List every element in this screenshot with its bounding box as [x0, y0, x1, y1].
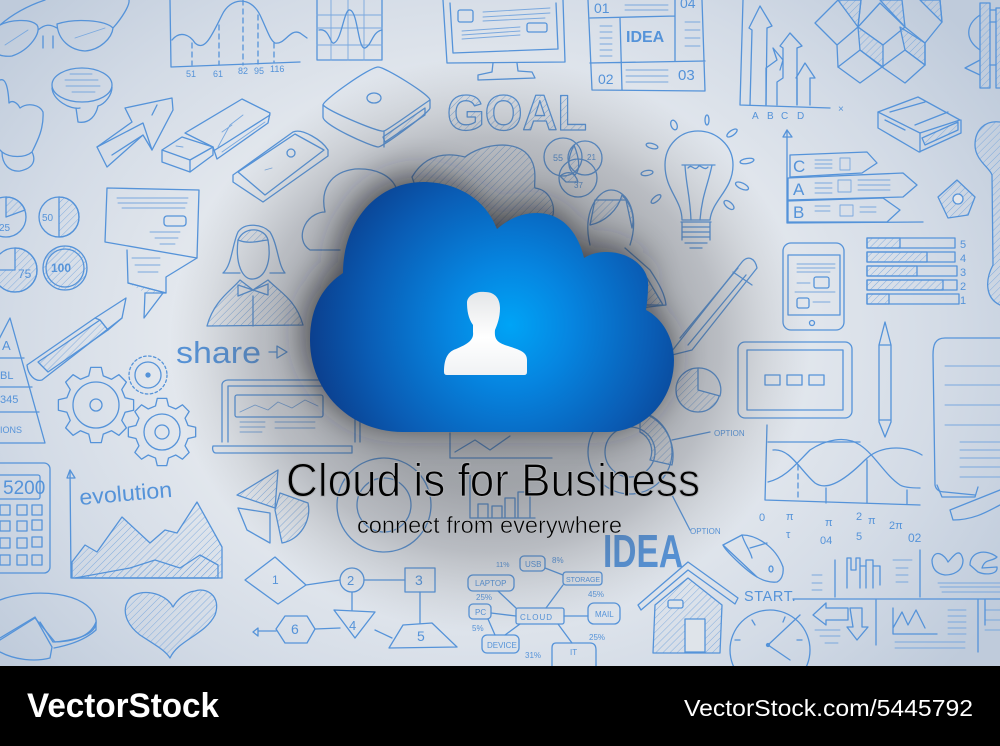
- target chart: [337, 458, 431, 552]
- blue cloud: [310, 182, 674, 432]
- panel: idea notes: IDEA: [626, 29, 665, 46]
- flowchart: 1: [272, 573, 279, 587]
- icon: laptop: [213, 380, 360, 453]
- wave chart: [765, 425, 922, 505]
- icon: calculator: [0, 463, 50, 573]
- ABC arrow labels: C: [793, 157, 805, 176]
- triangle chart: A: [2, 338, 11, 353]
- icon: hexagon nut: [938, 180, 975, 218]
- icon: speech bubble: [52, 68, 112, 122]
- document sketch: [933, 338, 1000, 520]
- cloud mind map: [468, 556, 620, 668]
- icon: tablet: [738, 342, 852, 418]
- ABC arrow labels: A: [793, 180, 805, 199]
- fractions axis text: [759, 511, 922, 547]
- panel: idea notes: 02: [598, 71, 614, 87]
- arrow growth chart: A: [752, 111, 759, 122]
- panel: idea notes: 03: [678, 67, 695, 84]
- cloud mind map: DEVICE: [487, 641, 517, 650]
- icon: mini server: [323, 67, 430, 147]
- fractions axis text: 04: [820, 535, 832, 547]
- icon: pen: [879, 322, 891, 437]
- icon: gears: [58, 356, 196, 466]
- fractions axis text: 2π: [889, 520, 903, 532]
- icon: pencil left: [27, 298, 126, 380]
- pie exploded: [237, 470, 309, 543]
- text: goal: GOAL: [447, 85, 587, 141]
- arrow growth chart: [740, 0, 844, 122]
- icon: monitor: [443, 0, 565, 80]
- text: idea: IDEA: [603, 525, 683, 577]
- user sketch right: [588, 190, 666, 308]
- panel: idea notes: 01: [594, 0, 610, 16]
- small grid chart: [317, 0, 382, 60]
- text: share: share: [176, 335, 261, 370]
- big donut right: [588, 410, 745, 536]
- cloud mind map: 8%: [552, 556, 564, 565]
- fractions axis text: 02: [908, 531, 922, 545]
- line chart top: 116: [270, 64, 284, 74]
- panel: idea notes: [588, 0, 705, 91]
- text: share: [176, 335, 287, 370]
- big donut right: OPTION: [714, 429, 745, 438]
- cloud mind map: CLOUD: [520, 613, 553, 622]
- flowchart: [245, 557, 457, 648]
- icon: pencil right: [668, 258, 757, 356]
- icon: businesswoman: [207, 225, 303, 326]
- flowchart: 4: [349, 618, 356, 633]
- venn circles: 21: [587, 153, 596, 162]
- cloud mind map: MAIL: [595, 610, 614, 619]
- triangle chart: IONS: [0, 425, 22, 435]
- line chart top: 95: [254, 66, 264, 76]
- cloud mind map: 11%: [496, 562, 510, 569]
- flowchart: 2: [347, 573, 354, 588]
- line chart top: 61: [213, 69, 223, 79]
- icon: light bulb: [641, 115, 754, 248]
- footer url: VectorStock.com/5445792: [684, 695, 973, 721]
- heart: [125, 590, 217, 658]
- big donut right: OPTION: [690, 527, 721, 536]
- flowchart: 6: [291, 621, 299, 637]
- arrow growth chart: B: [767, 111, 774, 122]
- cloud mind map: 31%: [525, 651, 541, 660]
- cloud mind map: 25%: [589, 633, 605, 642]
- fractions axis text: 0: [759, 512, 765, 524]
- icon: clock: [730, 610, 810, 690]
- arrow growth chart: ×: [838, 104, 844, 115]
- horizontal bars: 5: [960, 239, 966, 251]
- sketch clouds: [302, 145, 553, 250]
- horizontal bars: [867, 238, 966, 307]
- text: start: START.: [744, 589, 796, 605]
- horizontal bars: 3: [960, 267, 966, 279]
- subtitle: connect from everywhere: [357, 512, 622, 538]
- evolution chart: [67, 470, 222, 578]
- cloud mind map: 25%: [476, 593, 492, 602]
- icon: glasses: [0, 0, 129, 56]
- icon: arrow: [97, 98, 173, 167]
- flowchart: 5: [417, 628, 425, 644]
- arrow growth chart: C: [781, 111, 788, 122]
- horizontal bars: 1: [960, 295, 966, 307]
- icon: hand: [0, 80, 43, 171]
- pie circles: [0, 197, 87, 292]
- triangle chart: 345: [0, 394, 18, 406]
- pie circles: 75: [18, 267, 32, 281]
- pie disc bottom left: [0, 593, 96, 660]
- evolution chart: evolution: [78, 477, 173, 510]
- pie circles: 100: [51, 261, 71, 275]
- cloud mind map: 5%: [472, 624, 484, 633]
- line chart top: 82: [238, 66, 248, 76]
- horizontal bars: 4: [960, 253, 966, 265]
- arrow growth chart: D: [797, 111, 804, 122]
- shadow halo: [170, 57, 810, 633]
- dashboard sketch: [793, 550, 1000, 652]
- fractions axis text: π: [786, 511, 794, 523]
- fractions axis text: π: [868, 515, 876, 527]
- flowchart: 3: [415, 572, 423, 588]
- icon: calculator: 5200: [3, 478, 45, 499]
- pie circles: 50: [42, 213, 54, 224]
- icon: house: [638, 562, 738, 653]
- fractions axis text: 2: [856, 511, 862, 523]
- line chart top: [170, 0, 307, 79]
- icon: mouse: [723, 535, 783, 582]
- line chart under cloud: [450, 433, 552, 458]
- cloud mind map: 45%: [588, 590, 604, 599]
- line chart top: 51: [186, 69, 196, 79]
- banner sketch: [105, 188, 199, 318]
- cloud mind map: PC: [475, 608, 486, 617]
- icon: box device: [878, 97, 961, 152]
- triangle chart: [0, 318, 45, 443]
- icon: wrench right: [975, 122, 1000, 305]
- icon: tablet phone: [783, 243, 844, 330]
- ABC arrow labels: [783, 130, 923, 223]
- ABC arrow labels: B: [793, 203, 804, 222]
- icon: user silhouette: [444, 292, 527, 375]
- venn circles: 37: [574, 181, 583, 190]
- fractions axis text: π: [825, 517, 833, 529]
- cloud shadow: [305, 176, 669, 426]
- fractions axis text: τ: [786, 529, 791, 541]
- title: Cloud is for Business: [286, 454, 700, 506]
- venn circles: 55: [553, 153, 563, 163]
- icon: wrench corner: [965, 3, 1000, 88]
- icon: usb stick: [162, 99, 270, 172]
- cloud mind map: STORAGE: [566, 577, 600, 584]
- pie chart small: [676, 368, 721, 412]
- icon: hexagon cubes: [815, 0, 942, 83]
- footer brand: VectorStock: [27, 687, 219, 725]
- footer bar: [0, 666, 1000, 746]
- fractions axis text: 5: [856, 531, 862, 543]
- venn circles: [544, 138, 602, 197]
- icon: phone: [233, 131, 328, 202]
- triangle chart: BL: [0, 370, 13, 382]
- cloud mind map: LAPTOP: [475, 579, 506, 588]
- cloud mind map: USB: [525, 560, 541, 569]
- small bar chart under cloud: [470, 475, 535, 518]
- cloud mind map: IT: [570, 648, 577, 657]
- horizontal bars: 2: [960, 281, 966, 293]
